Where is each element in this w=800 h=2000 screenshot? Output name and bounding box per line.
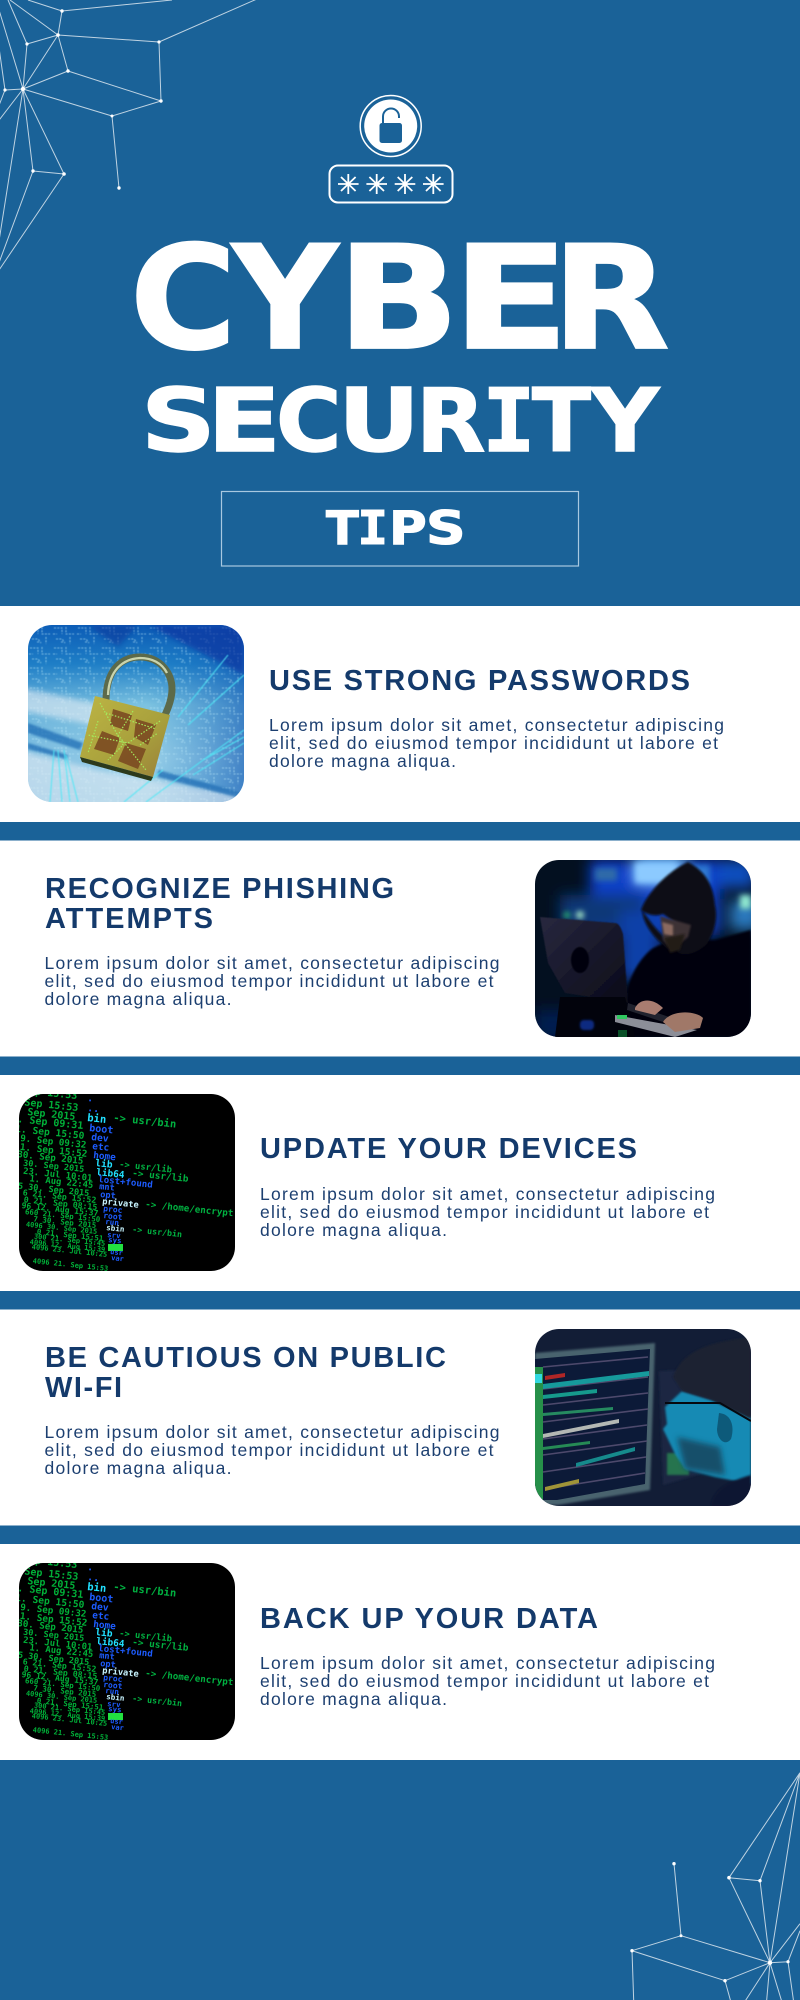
subtitle box: TIPS: P xyxy=(389,502,427,555)
body text: elit, sed do eiusmod tempor incididunt ut labore et xyxy=(260,1671,709,1691)
image: hooded hacker at laptop xyxy=(535,855,760,1040)
title: SECURITY: U xyxy=(338,370,420,472)
heading: UPDATE YOUR DEVICES xyxy=(260,1133,637,1165)
title: CYBER: Y xyxy=(230,215,340,383)
panel: use strong passwords xyxy=(0,606,800,822)
icon: padlock with password field xyxy=(330,96,452,202)
subtitle box: TIPS: T xyxy=(326,502,359,556)
subtitle box: TIPS: I xyxy=(357,502,388,555)
body text: elit, sed do eiusmod tempor incididunt ut labore et xyxy=(269,733,718,753)
title: SECURITY: R xyxy=(416,370,485,472)
title: CYBER xyxy=(130,214,670,383)
body text xyxy=(44,1422,500,1478)
title: SECURITY: I xyxy=(482,370,536,472)
body text: Lorem ipsum dolor sit amet, consectetur adipiscing xyxy=(269,715,724,735)
body text: elit, sed do eiusmod tempor incididunt ut labore et xyxy=(260,1202,709,1222)
body text: dolore magna aliqua. xyxy=(44,989,232,1009)
network decoration: top left xyxy=(0,0,257,279)
subtitle box: TIPS xyxy=(222,492,578,566)
title: SECURITY: S xyxy=(141,370,216,472)
panel: recognize phishing attempts xyxy=(0,840,800,1056)
heading: RECOGNIZE PHISHING xyxy=(45,873,394,905)
title: SECURITY: Y xyxy=(590,371,660,472)
title: SECURITY: T xyxy=(532,371,591,472)
panel: update your devices xyxy=(0,1075,800,1291)
body text xyxy=(260,1184,715,1240)
body text xyxy=(44,953,500,1009)
heading: USE STRONG PASSWORDS xyxy=(269,665,690,697)
title: SECURITY: E xyxy=(207,371,281,472)
body text: dolore magna aliqua. xyxy=(269,751,456,771)
body text: Lorem ipsum dolor sit amet, consectetur adipiscing xyxy=(44,1422,500,1442)
heading: ATTEMPTS xyxy=(45,903,213,935)
heading: WI-FI xyxy=(45,1372,122,1404)
heading: BE CAUTIOUS ON PUBLIC xyxy=(45,1342,446,1374)
body text: Lorem ipsum dolor sit amet, consectetur adipiscing xyxy=(260,1653,715,1673)
heading xyxy=(45,873,394,935)
title: SECURITY: C xyxy=(276,370,341,472)
title: CYBER: B xyxy=(337,215,459,382)
body text xyxy=(260,1653,715,1709)
title: CYBER: R xyxy=(552,214,670,382)
heading: BACK UP YOUR DATA xyxy=(260,1603,598,1635)
body text: Lorem ipsum dolor sit amet, consectetur adipiscing xyxy=(44,953,500,973)
title: CYBER: E xyxy=(452,216,569,382)
title: CYBER: C xyxy=(130,216,236,383)
body text xyxy=(269,715,724,771)
image: terminal listing xyxy=(19,1094,235,1271)
panel: back up your data xyxy=(0,1544,800,1760)
body text: Lorem ipsum dolor sit amet, consectetur adipiscing xyxy=(260,1184,715,1204)
image: golden padlock on circuit background xyxy=(28,625,244,802)
subtitle box: TIPS: S xyxy=(426,501,466,555)
panel: be cautious on public wi-fi xyxy=(0,1310,800,1526)
body text: elit, sed do eiusmod tempor incididunt ut labore et xyxy=(44,971,494,991)
body text: dolore magna aliqua. xyxy=(44,1458,232,1478)
title: SECURITY xyxy=(141,370,660,472)
heading xyxy=(45,1342,446,1404)
body text: elit, sed do eiusmod tempor incididunt ut labore et xyxy=(44,1440,494,1460)
image: terminal listing xyxy=(19,1563,235,1740)
body text: dolore magna aliqua. xyxy=(260,1689,447,1709)
network decoration: bottom right xyxy=(536,1773,800,2000)
body text: dolore magna aliqua. xyxy=(260,1220,447,1240)
image: man in cap looking at monitor xyxy=(535,1329,751,1506)
